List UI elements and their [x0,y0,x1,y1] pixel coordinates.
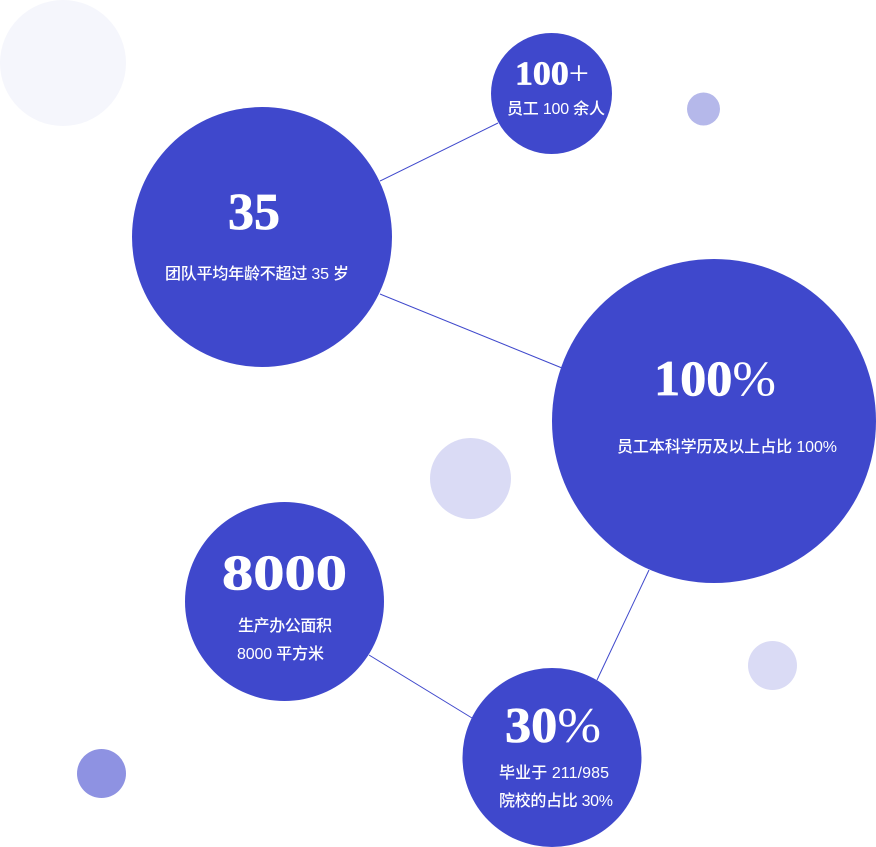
decorative circle: top left pale [0,0,126,126]
label: graduates line 2: 院校的占比 30% [499,791,613,810]
label: floor area line 1: 生产办公面积 [238,617,332,635]
label: team age: 团队平均年龄不超过 35 岁 [165,265,349,283]
label: floor area line 2: 8000 平方米 [237,644,324,663]
number: 100%: 100% [654,350,776,406]
bubble: 211/985 share [462,668,642,847]
decorative circle: top right small [687,92,720,126]
bubble: floor area [185,502,384,701]
bubble: staff count [491,33,612,154]
label: degree share: 员工本科学历及以上占比 100% [617,437,837,456]
label: staff count: 员工 100 余人 [507,99,605,118]
connector: 100% to 30% [597,570,649,680]
decorative circle: lower left [77,749,126,798]
number: 30%: 30% [505,696,601,752]
label: graduates line 1: 毕业于 211/985 [499,764,609,782]
bubble: degree share [552,259,876,583]
number: 35: 35 [228,184,280,241]
bubble: team average age [132,107,392,367]
connector: 35 to 100% [380,294,562,368]
connector: 8000 to 30% [369,655,472,718]
number: 100+: 100+ [515,56,589,92]
decorative circle: lower right [748,641,797,690]
connector: 35 to 100+ [380,123,498,181]
decorative circle: centre [430,438,511,519]
number: 8000: 8000 [222,544,347,600]
